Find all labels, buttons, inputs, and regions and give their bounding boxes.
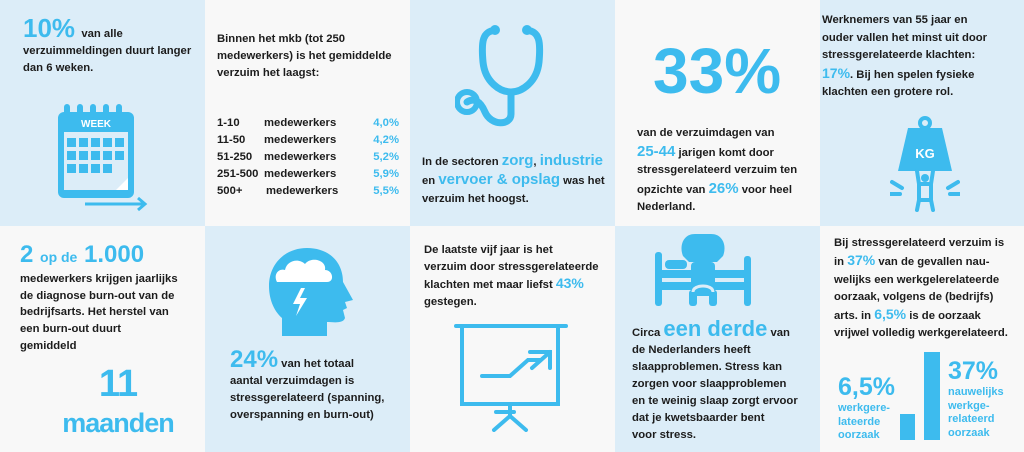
text: 2 op de 1.000: 2 op de 1.000 (20, 241, 144, 268)
panel: mkb table (205, 0, 410, 226)
text: 24% of absence days: 24% van het totaal (230, 346, 354, 373)
text: een derde: de Nederlanders heeft (632, 344, 751, 356)
text: 55+ workers: ouder vallen het minst uit door (822, 32, 987, 44)
table: absence by company size: 11-50 (217, 134, 245, 146)
label: 37%: relateerd (948, 413, 994, 425)
label: 6,5%: lateerde (838, 416, 880, 428)
text: mkb intro: medewerkers) is het gemiddelde (217, 50, 392, 62)
text: 25-44: 25-44 jarigen komt door (637, 142, 774, 160)
table: absence by company size: medewerkers (264, 151, 336, 163)
table: absence by company size: medewerkers (264, 134, 336, 146)
panel: sleep (615, 226, 820, 452)
icon: person on bed (655, 234, 751, 306)
text: 25-44: opzichte van 26% voor heel (637, 180, 792, 196)
text: 55+ workers (822, 14, 987, 98)
text: 55+ workers: 17%. Bij hen spelen fysieke (822, 64, 974, 80)
panel: burn-out 11 months (0, 226, 205, 452)
big number 11 maanden: maanden (62, 408, 174, 438)
text: 24% of absence days: overspanning en burn-out) (230, 409, 374, 421)
table: absence by company size: 5,5% (373, 185, 399, 197)
text: 55+ workers: klachten een grotere rol. (822, 86, 953, 98)
text: een derde: voor stress. (632, 429, 696, 441)
text: sectors: In de sectoren zorg, industrie (422, 152, 603, 169)
table: absence by company size: 251-500 (217, 168, 258, 180)
text: 37% and 6,5%: vrijwel volledig werkgerelateerd. (834, 327, 1008, 339)
text: 10% of absences: 10% van alle (23, 13, 123, 43)
label: 6,5% (838, 373, 895, 441)
icon: calendar week (58, 104, 148, 211)
text: burn-out diagnosis (20, 273, 178, 352)
text: burn-out diagnosis: bedrijfsarts. Het herstel van (20, 306, 169, 318)
table: absence by company size: medewerkers (266, 185, 338, 197)
table: absence by company size: 4,2% (373, 134, 399, 146)
icon: KG weight: KG (915, 146, 935, 161)
text: 25-44: stressgerelateerd verzuim ten (637, 164, 797, 176)
bar: 37% (924, 352, 940, 440)
text: 24% of absence days: stressgerelateerd (spanning, (230, 392, 384, 404)
text: mkb intro: verzuim het laagst: (217, 67, 319, 79)
text: 24% of absence days (230, 346, 384, 421)
icon: calendar week: WEEK (81, 119, 112, 130)
text: 10% of absences: dan 6 weken. (23, 62, 93, 74)
text: 37% and 6,5%: in 37% van de gevallen nau- (834, 252, 989, 268)
label: 6,5%: 6,5% (838, 373, 895, 401)
text: 10% of absences: verzuimmeldingen duurt langer (23, 45, 191, 57)
text: een derde: Circa een derde van (632, 316, 790, 341)
text: een derde: zorgen voor slaapproblemen (632, 378, 786, 390)
text: 24% of absence days: aantal verzuimdagen is (230, 375, 354, 387)
bar: 6,5% (900, 414, 915, 440)
text: mkb intro: Binnen het mkb (tot 250 (217, 33, 345, 45)
label: 37%: 37% (948, 357, 998, 385)
text: 43% rise: klachten met maar liefst 43% (424, 275, 584, 291)
table: absence by company size: 500+ (217, 185, 242, 197)
table: absence by company size: 5,9% (373, 168, 399, 180)
text: een derde: slaapproblemen. Stress kan (632, 361, 782, 373)
label: 37%: oorzaak (948, 427, 990, 439)
table: absence by company size: 5,2% (373, 151, 399, 163)
big number 11 maanden (62, 363, 174, 438)
text: 43% rise: De laatste vijf jaar is het (424, 244, 553, 256)
text: 25-44 (637, 127, 797, 213)
text: een derde: dat je kwetsbaarder bent (632, 412, 764, 424)
table: absence by company size: medewerkers (264, 168, 336, 180)
panel: 33% (615, 0, 820, 226)
text: 10% of absences (23, 13, 192, 74)
text: burn-out diagnosis: gemiddeld (20, 340, 76, 352)
text: 37% and 6,5%: oorzaak, volgens de (bedrijfs) (834, 291, 993, 303)
label: 6,5%: werkgere- (838, 402, 890, 414)
text: sectors (422, 152, 605, 205)
big number 11 maanden: 11 (99, 363, 137, 405)
table: absence by company size: 4,0% (373, 117, 399, 129)
text: 55+ workers: stressgerelateerde klachten: (822, 49, 975, 61)
text: 55+ workers: Werknemers van 55 jaar en (822, 14, 967, 26)
text: 43% rise: gestegen. (424, 296, 477, 308)
icon: stethoscope (455, 25, 544, 126)
table: absence by company size: 1-10 (217, 117, 240, 129)
icon: presentation board with rising line (454, 324, 568, 432)
label: 37% (948, 357, 1004, 439)
text: 43% rise (424, 244, 599, 308)
text: 37% and 6,5% (834, 237, 1008, 339)
text: sectors: verzuim het hoogst. (422, 193, 529, 205)
table: absence by company size (217, 117, 399, 197)
panel: 10% long absence (0, 0, 205, 226)
text: 37% and 6,5%: arts. in 6,5% is de oorzaak (834, 306, 981, 322)
label: 37%: werkge- (948, 400, 990, 412)
text: sectors: en vervoer & opslag was het (422, 171, 605, 188)
panel: 24% stress (205, 226, 410, 452)
label: 37%: nauwelijks (948, 386, 1004, 398)
text: 43% rise: verzuim door stressgerelateerde (424, 261, 599, 273)
text: mkb intro (217, 33, 392, 79)
bar chart: 6,5% vs 37% (838, 352, 1004, 441)
table: absence by company size: 51-250 (217, 151, 252, 163)
icon: KG weight (890, 116, 960, 212)
panel: 43% increase (410, 226, 615, 452)
text: 37% and 6,5%: Bij stressgerelateerd verzuim is (834, 237, 1004, 249)
panel: 55+ (820, 0, 1024, 226)
text: 25-44: Nederland. (637, 201, 695, 213)
text: 25-44: van de verzuimdagen van (637, 127, 774, 139)
label: 6,5%: oorzaak (838, 429, 880, 441)
icon: head with storm cloud (269, 248, 353, 336)
big number 33%: 33% (653, 35, 781, 107)
text: burn-out diagnosis: medewerkers krijgen jaarlijks (20, 273, 178, 285)
table: absence by company size: medewerkers (264, 117, 336, 129)
text: een derde (632, 316, 798, 441)
text: burn-out diagnosis: de diagnose burn-out van de (20, 290, 174, 302)
panel: work-related cause (820, 226, 1024, 452)
text: burn-out diagnosis: een burn-out duurt (20, 323, 121, 335)
panel: sectors (410, 0, 615, 226)
text: een derde: en te weinig slaap zorgt ervoor (632, 395, 798, 407)
text: 37% and 6,5%: welijks een werkgelerelateerde (834, 274, 999, 286)
